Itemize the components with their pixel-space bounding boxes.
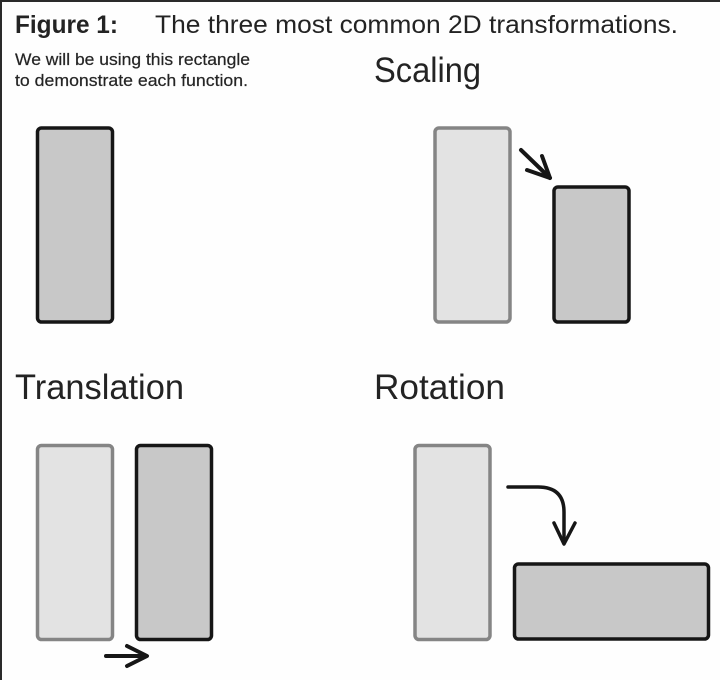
heading: rotation: Rotation: [374, 368, 505, 407]
intro text: to demonstrate each function.: [15, 72, 248, 90]
heading: scaling: Scaling: [374, 51, 481, 90]
translation: original rectangle: [38, 446, 112, 640]
title: Figure 1:: [15, 11, 118, 39]
intro text: [15, 51, 250, 90]
rotation: rotated rectangle: [514, 564, 708, 639]
translation: moved rectangle: [136, 446, 212, 640]
scaling: original rectangle: [435, 128, 510, 322]
original rectangle: [38, 128, 112, 322]
title: The three most common 2D transformations.: [155, 11, 678, 39]
scaling: scaled rectangle: [554, 187, 629, 322]
rotation: original rectangle: [415, 446, 490, 640]
arrow: rotation: [508, 487, 575, 544]
heading: translation: Translation: [15, 368, 184, 407]
arrow: scaling: [521, 150, 550, 178]
arrow: translation: [106, 646, 147, 666]
intro text: We will be using this rectangle: [15, 51, 250, 69]
